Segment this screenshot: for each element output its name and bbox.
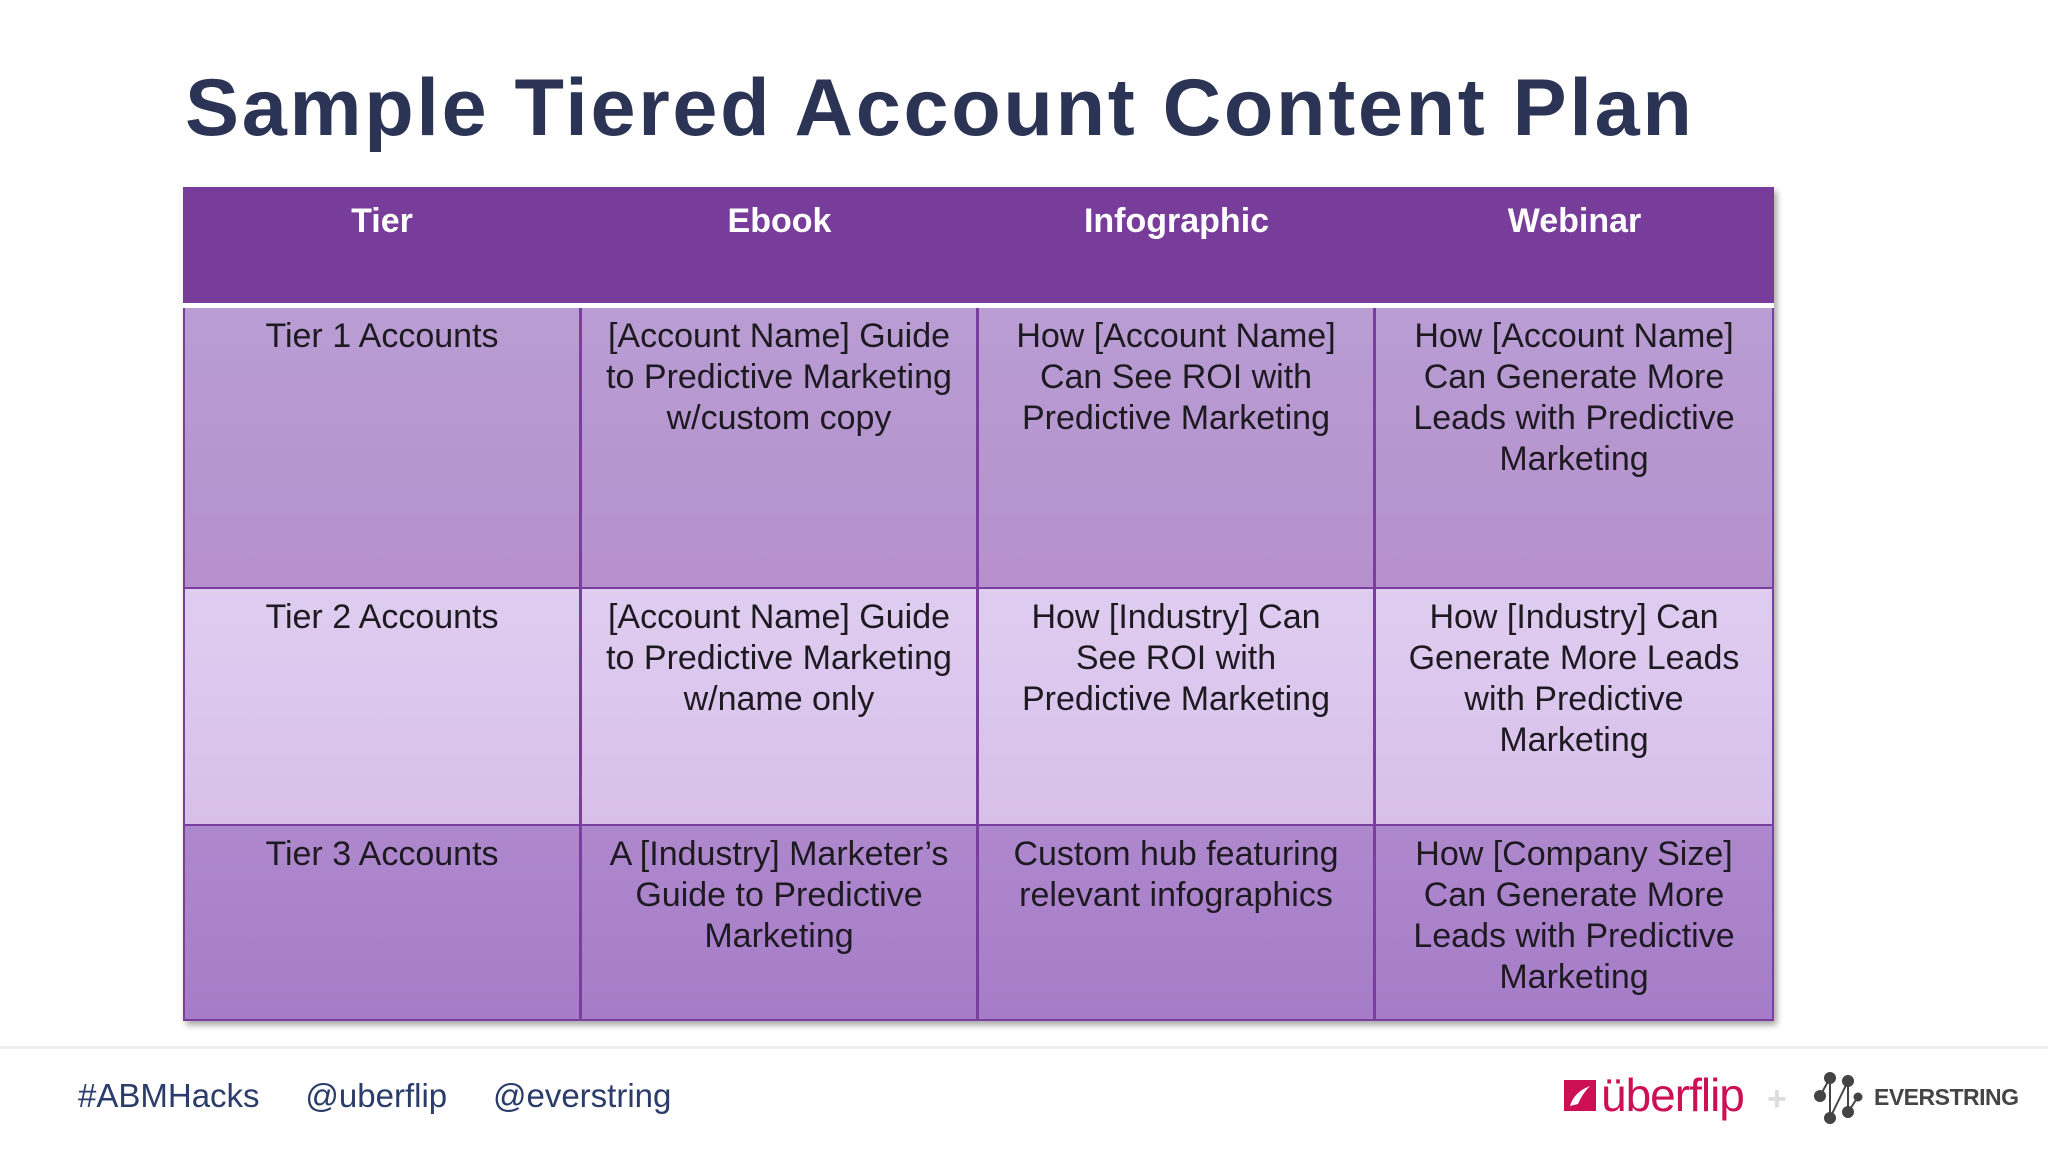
row 3: ebook: Guide to Predictive [635, 876, 923, 914]
header: Tier: Tier [351, 202, 413, 240]
row 1: tier 1 [185, 308, 579, 587]
row 3: tier 3 [185, 826, 579, 1019]
footer hashtags: #ABMHacks @uberflip @everstring [78, 1077, 671, 1114]
logo: everstring [1814, 1072, 2019, 1124]
row 3: webinar: Marketing [1499, 958, 1649, 996]
plus sign: + [1767, 1080, 1787, 1118]
row 1: webinar: Marketing [1499, 440, 1649, 478]
row 3: infographic: relevant infographics [1019, 876, 1333, 914]
row 1: ebook: to Predictive Marketing [606, 358, 952, 396]
row 2: infographic: See ROI with [1076, 639, 1276, 677]
row 3: webinar: How [Company Size] [1415, 835, 1733, 873]
header: Ebook [581, 187, 978, 303]
header: Infographic: Infographic [1084, 202, 1269, 240]
title: Sample Tiered Account Content Plan [185, 63, 1695, 153]
row 3: webinar [1376, 826, 1772, 1019]
row 2: ebook: [Account Name] Guide [608, 598, 950, 636]
header: Tier [183, 187, 581, 303]
header: Infographic [978, 187, 1375, 303]
row 2: ebook: to Predictive Marketing [606, 639, 952, 677]
row 3: webinar: Can Generate More [1424, 876, 1724, 914]
row 2: ebook [582, 589, 976, 824]
row 3: webinar: Leads with Predictive [1413, 917, 1735, 955]
row 1: infographic [979, 308, 1373, 587]
row 3: ebook [582, 826, 976, 1019]
row 3: ebook: Marketing [704, 917, 854, 955]
header: Webinar: Webinar [1508, 202, 1641, 240]
row 2: webinar: with Predictive [1464, 680, 1684, 718]
row 1: infographic: Can See ROI with [1040, 358, 1312, 396]
row 1: infographic: Predictive Marketing [1022, 399, 1330, 437]
row 3: tier 3: Tier 3 Accounts [265, 835, 499, 873]
row 2: tier 2: Tier 2 Accounts [265, 598, 499, 636]
row 2: infographic [979, 589, 1373, 824]
row 3: infographic: Custom hub featuring [1013, 835, 1339, 873]
row 1: webinar [1376, 308, 1772, 587]
row 2: webinar: Marketing [1499, 721, 1649, 759]
row 3: infographic [979, 826, 1373, 1019]
table [183, 187, 1774, 1021]
row 2: ebook: w/name only [684, 680, 874, 718]
row 1: tier 1: Tier 1 Accounts [265, 317, 499, 355]
row 1: infographic: How [Account Name] [1016, 317, 1336, 355]
row 1: webinar: How [Account Name] [1414, 317, 1734, 355]
row 1: webinar: Leads with Predictive [1413, 399, 1735, 437]
row 2: infographic: Predictive Marketing [1022, 680, 1330, 718]
row 2: tier 2 [185, 589, 579, 824]
row 2: webinar: How [Industry] Can [1429, 598, 1719, 636]
logo: everstring: EVERSTRING [1874, 1084, 2019, 1110]
row 2: webinar [1376, 589, 1772, 824]
row 2: infographic: How [Industry] Can [1031, 598, 1321, 636]
row 1: ebook [582, 308, 976, 587]
header: Webinar [1375, 187, 1774, 303]
row 3: ebook: A [Industry] Marketer’s [610, 835, 948, 873]
logo: uberflip: überflip [1601, 1069, 1744, 1121]
row 2: webinar: Generate More Leads [1409, 639, 1739, 677]
row 1: webinar: Can Generate More [1424, 358, 1724, 396]
header: Ebook: Ebook [728, 202, 831, 240]
row 1: ebook: w/custom copy [667, 399, 891, 437]
row 1: ebook: [Account Name] Guide [608, 317, 950, 355]
